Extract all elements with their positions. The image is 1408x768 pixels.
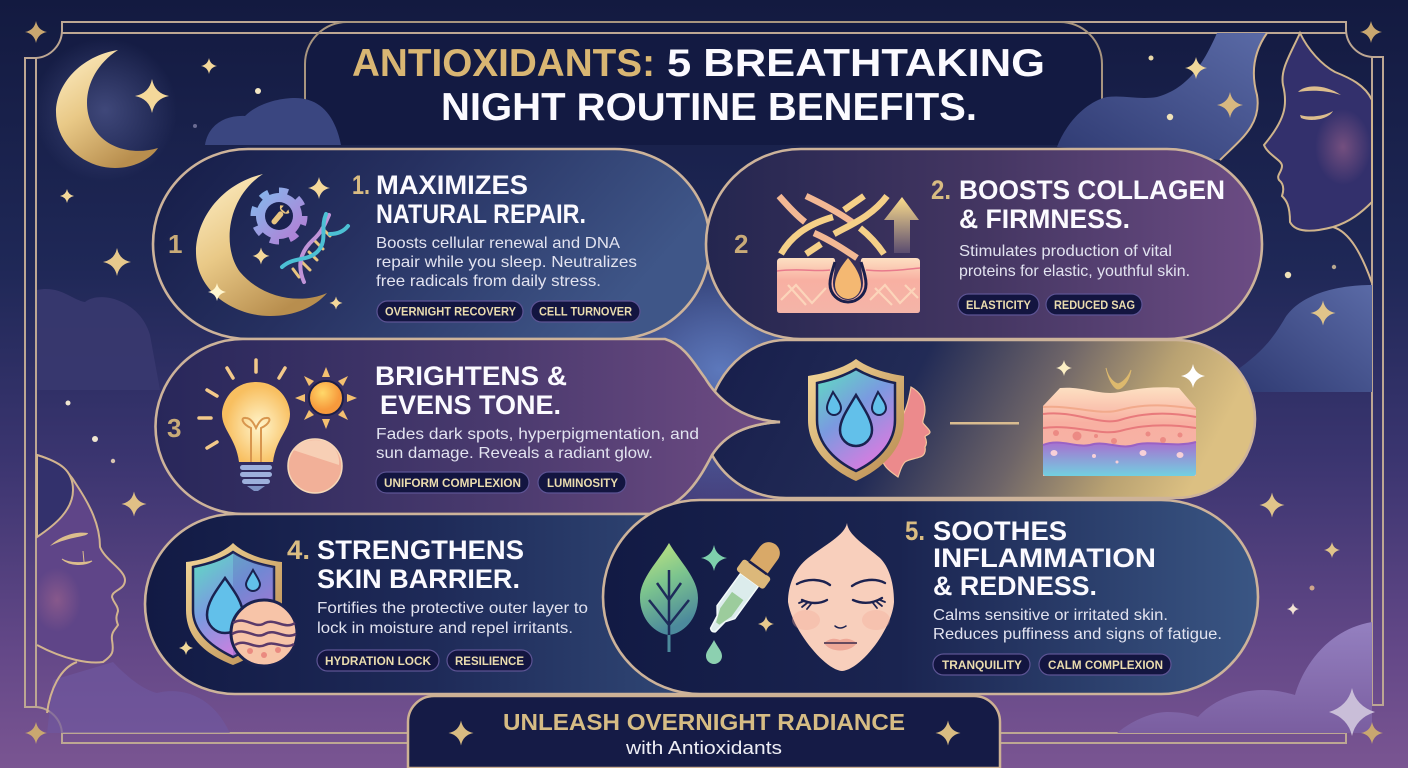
heading: EVENS TONE. bbox=[380, 390, 561, 420]
body text: free radicals from daily stress. bbox=[376, 273, 601, 290]
heading: BOOSTS COLLAGEN bbox=[959, 175, 1225, 205]
tags: CALM COMPLEXION bbox=[1048, 660, 1163, 672]
panel: 4 strengthens skin barrier bbox=[145, 514, 720, 694]
step number: 2 bbox=[734, 229, 748, 259]
body text: proteins for elastic, youthful skin. bbox=[959, 263, 1190, 280]
panel: 3 brightens and evens tone bbox=[155, 339, 780, 514]
tags bbox=[958, 294, 1142, 315]
panel: benefit highlight with shield and skin layers bbox=[712, 340, 1255, 498]
panel: 5 soothes inflammation and redness bbox=[603, 500, 1258, 694]
illustration: woman's profile, bottom left bbox=[33, 455, 125, 713]
tags: TRANQUILITY bbox=[942, 660, 1022, 672]
body text bbox=[933, 607, 1222, 643]
icon: collagen weave over skin bbox=[777, 196, 920, 313]
footer stars bbox=[448, 720, 960, 746]
step number: 3 bbox=[167, 413, 181, 443]
body text: lock in moisture and repel irritants. bbox=[317, 620, 573, 637]
tags bbox=[317, 650, 532, 671]
title: 5 BREATHTAKING bbox=[667, 42, 1045, 85]
body text bbox=[376, 426, 699, 462]
heading: 1. bbox=[352, 170, 370, 200]
icon: moon, gear and DNA bbox=[196, 174, 348, 316]
heading: MAXIMIZES bbox=[376, 170, 528, 200]
heading: NATURAL REPAIR. bbox=[376, 199, 586, 229]
connector line bbox=[950, 422, 1019, 424]
body text: Fades dark spots, hyperpigmentation, and bbox=[376, 426, 699, 443]
footer text: with Antioxidants bbox=[625, 738, 782, 758]
body text bbox=[317, 600, 588, 637]
step number: 1 bbox=[168, 229, 182, 259]
heading: STRENGTHENS bbox=[317, 535, 524, 565]
body text: repair while you sleep. Neutralizes bbox=[376, 254, 637, 271]
heading: 5. bbox=[905, 516, 925, 546]
body text bbox=[376, 235, 637, 290]
body text: Stimulates production of vital bbox=[959, 243, 1172, 260]
heading: 4. bbox=[287, 535, 310, 565]
title panel outline bbox=[305, 22, 1102, 100]
illustration: woman's profile, top right bbox=[1220, 33, 1372, 283]
footer panel bbox=[408, 696, 1000, 768]
heading bbox=[931, 175, 1225, 234]
heading: BRIGHTENS & bbox=[375, 361, 567, 391]
icon: shield with droplets and face bbox=[808, 359, 930, 481]
tags: UNIFORM COMPLEXION bbox=[384, 478, 521, 490]
footer text bbox=[503, 709, 905, 758]
tags: CELL TURNOVER bbox=[539, 306, 633, 318]
tags: ELASTICITY bbox=[966, 300, 1031, 312]
heading bbox=[287, 535, 524, 594]
heading bbox=[905, 516, 1156, 601]
tags bbox=[377, 301, 640, 322]
title: ANTIOXIDANTS: bbox=[352, 42, 655, 85]
body text: Calms sensitive or irritated skin. bbox=[933, 607, 1168, 624]
heading: SOOTHES bbox=[933, 516, 1067, 546]
heading bbox=[352, 170, 586, 229]
heading bbox=[375, 361, 567, 420]
body text: Boosts cellular renewal and DNA bbox=[376, 235, 620, 252]
title: NIGHT ROUTINE BENEFITS. bbox=[441, 86, 977, 129]
tags: HYDRATION LOCK bbox=[325, 656, 432, 668]
panel: 1 maximizes natural repair bbox=[153, 149, 710, 339]
footer text: UNLEASH OVERNIGHT RADIANCE bbox=[503, 709, 905, 735]
body text: Reduces puffiness and signs of fatigue. bbox=[933, 626, 1222, 643]
icon: bulb, sun and glow disc bbox=[199, 360, 357, 493]
tags: REDUCED SAG bbox=[1054, 300, 1135, 312]
panel: 2 boosts collagen and firmness bbox=[706, 149, 1262, 339]
body text bbox=[959, 243, 1190, 280]
heading: 2. bbox=[931, 175, 951, 205]
tags: OVERNIGHT RECOVERY bbox=[385, 306, 516, 318]
icon: skin layers bbox=[1043, 360, 1205, 476]
tags: RESILIENCE bbox=[455, 656, 524, 668]
icon: shield and skin circle bbox=[179, 543, 297, 666]
heading: & FIRMNESS. bbox=[959, 204, 1130, 234]
icon: leaf, dropper and calm face bbox=[640, 523, 894, 671]
heading: SKIN BARRIER. bbox=[317, 564, 520, 594]
tags: LUMINOSITY bbox=[547, 478, 618, 490]
body text: sun damage. Reveals a radiant glow. bbox=[376, 445, 653, 462]
panel: title backing bbox=[305, 22, 1102, 145]
heading: & REDNESS. bbox=[933, 571, 1097, 601]
icon: crescent moon bbox=[56, 50, 158, 168]
title bbox=[352, 42, 1045, 129]
tags bbox=[933, 654, 1171, 675]
tags bbox=[376, 472, 626, 493]
body text: Fortifies the protective outer layer to bbox=[317, 600, 588, 617]
heading: INFLAMMATION bbox=[933, 543, 1156, 573]
